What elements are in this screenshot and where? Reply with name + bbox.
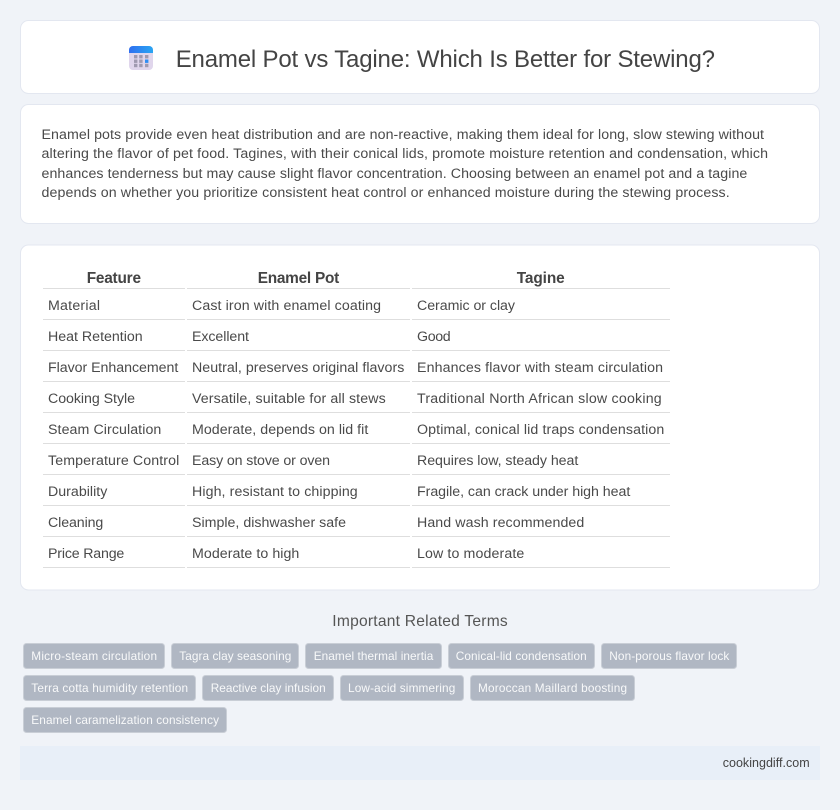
table row: steam circulation (43, 422, 670, 444)
table row: durability: High, resistant to chipping (192, 484, 358, 500)
tag: Non-porous flavor lock (609, 649, 729, 663)
table row: durability (43, 484, 670, 506)
tag: Conical-lid condensation (456, 649, 587, 663)
tag (24, 676, 196, 700)
table row: price range: Moderate to high (192, 546, 299, 562)
table row: material (43, 298, 670, 320)
title: Enamel Pot vs Tagine: Which Is Better for Stewing? (176, 46, 715, 73)
table row: heat retention: Heat Retention (48, 329, 143, 345)
table row: price range: Low to moderate (417, 546, 524, 562)
text block: introduction: altering the flavor of pet food. Tagines, with their conical lids, promote moisture retention and condensation, which (42, 146, 768, 162)
tag (602, 644, 736, 668)
table row: cleaning: Hand wash recommended (417, 515, 584, 531)
tag (340, 676, 464, 700)
tag: Low-acid simmering (348, 681, 455, 695)
text block: introduction: enhances tenderness but may cause slight flavor concentration. Choosing between an enamel pot and a tagine (42, 166, 747, 182)
table row: heat retention (43, 329, 670, 351)
tag (202, 676, 334, 700)
table row: cooking style: Versatile, suitable for all stews (192, 391, 386, 407)
table row: heat retention: Good (417, 329, 451, 345)
panel: header (20, 20, 820, 94)
table row: flavor enhancement: Flavor Enhancement (48, 360, 178, 376)
heading: related terms: Important Related Terms (332, 613, 508, 630)
tag: Moroccan Maillard boosting (478, 681, 627, 695)
table row: material: Material (48, 298, 100, 314)
text block: introduction: Enamel pots provide even heat distribution and are non-reactive, making them ideal for long, slow stewing without (42, 127, 764, 143)
table row: cooking style: Traditional North African slow cooking (417, 391, 662, 407)
table row: material: Cast iron with enamel coating (192, 298, 381, 314)
table row: durability: Durability (48, 484, 108, 500)
tag: Terra cotta humidity retention (31, 681, 188, 695)
table header (43, 270, 670, 289)
tag (24, 644, 164, 668)
table row: steam circulation: Optimal, conical lid traps condensation (417, 422, 664, 438)
tag (448, 644, 594, 668)
table row: temperature control (43, 453, 670, 475)
panel: introduction (20, 104, 820, 224)
tag (306, 644, 442, 668)
table header: Tagine (517, 270, 565, 287)
table row: steam circulation: Steam Circulation (48, 422, 161, 438)
table row: cleaning (43, 515, 670, 537)
table row: temperature control: Temperature Control (48, 453, 179, 469)
tag: Tagra clay seasoning (179, 649, 291, 663)
icon: calendar (129, 46, 153, 70)
tag: Enamel thermal inertia (314, 649, 434, 663)
footer (20, 746, 820, 780)
table row: flavor enhancement: Neutral, preserves original flavors (192, 360, 404, 376)
table row: heat retention: Excellent (192, 329, 249, 345)
table row: material: Ceramic or clay (417, 298, 516, 314)
table row: temperature control: Easy on stove or oven (192, 453, 330, 469)
tag (470, 676, 634, 700)
tag list: related terms (24, 644, 736, 732)
table row: flavor enhancement: Enhances flavor with steam circulation (417, 360, 663, 376)
tag (24, 708, 226, 732)
text block: introduction: depends on whether you prioritize consistent heat control or enhanced moisture during the stewing process. (42, 185, 730, 201)
table row: flavor enhancement (43, 360, 670, 382)
table row: cleaning: Cleaning (48, 515, 103, 531)
tag: Enamel caramelization consistency (31, 713, 219, 727)
table row: durability: Fragile, can crack under high heat (417, 484, 630, 500)
tag: Micro-steam circulation (31, 649, 157, 663)
table row: price range: Price Range (48, 546, 124, 562)
table header: Enamel Pot (258, 270, 339, 287)
table row: price range (43, 546, 670, 568)
table row: temperature control: Requires low, steady heat (417, 453, 578, 469)
table row: steam circulation: Moderate, depends on lid fit (192, 422, 368, 438)
table header: Feature (87, 270, 141, 287)
footer source: cookingdiff.com (723, 756, 810, 770)
panel: comparison table (20, 245, 820, 590)
tag (172, 644, 298, 668)
table row: cooking style: Cooking Style (48, 391, 135, 407)
tag: Reactive clay infusion (211, 681, 326, 695)
text block: introduction (42, 127, 768, 201)
table row: cleaning: Simple, dishwasher safe (192, 515, 346, 531)
table row: cooking style (43, 391, 670, 413)
